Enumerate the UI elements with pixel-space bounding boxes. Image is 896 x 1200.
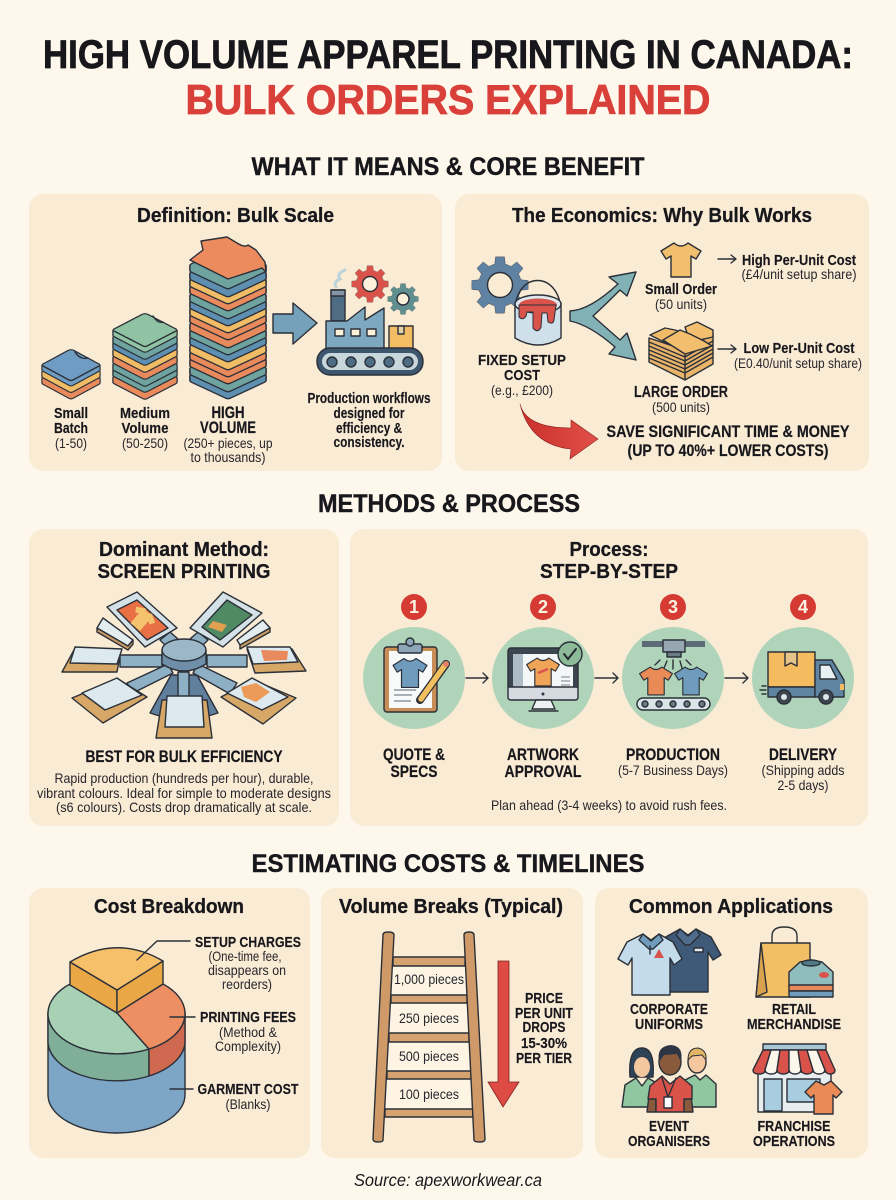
high cost label: (£4/unit setup share) — [742, 266, 856, 282]
price drop label: 15-30% — [521, 1035, 567, 1052]
icon: small order tee — [661, 243, 701, 277]
batch labels: Volume — [122, 420, 168, 437]
step labels: ARTWORK — [507, 746, 579, 764]
step labels: QUOTE & — [383, 746, 445, 764]
savings callout: (UP TO 40%+ LOWER COSTS) — [628, 442, 828, 460]
price drop label: PER UNIT — [515, 1005, 573, 1022]
label: setup charges: disappears on — [208, 962, 286, 978]
large order label: (500 units) — [652, 399, 710, 415]
step labels: 2-5 days) — [778, 777, 828, 793]
step badges: 3 — [668, 597, 678, 617]
savings callout — [606, 423, 850, 460]
icon: event staff — [622, 1045, 716, 1112]
caption: production workflows: consistency. — [334, 435, 404, 451]
low cost label: Low Per-Unit Cost — [744, 340, 855, 357]
panel: screen printing — [29, 529, 339, 826]
icon: gear and paint bucket — [472, 257, 561, 345]
price drop label — [515, 990, 573, 1067]
step badges: 2 — [538, 597, 548, 617]
panel heading: process: Process: — [570, 538, 648, 561]
icon: large order stacks — [649, 322, 713, 380]
icon: high volume stack — [190, 237, 266, 399]
screen printing description: (s6 colours). Costs drop dramatically at scale. — [56, 799, 312, 815]
panel: definition bulk scale — [29, 194, 442, 471]
step labels: (Shipping adds — [762, 762, 844, 778]
label: uniforms and retail: MERCHANDISE — [747, 1016, 841, 1033]
panel: volume breaks — [321, 888, 583, 1158]
screen printing description: vibrant colours. Ideal for simple to moderate designs — [37, 785, 331, 801]
price drop label: PER TIER — [516, 1050, 572, 1067]
icon: small stack — [42, 350, 100, 399]
heading: what it means: WHAT IT MEANS & CORE BENEFIT — [252, 153, 644, 181]
arrow: curved red — [520, 404, 598, 459]
batch labels: to thousands) — [190, 449, 266, 465]
arrow: small to high cost — [718, 255, 736, 263]
savings callout: SAVE SIGNIFICANT TIME & MONEY — [606, 423, 850, 441]
title: BULK ORDERS EXPLAINED — [186, 76, 710, 123]
arrow: to factory — [273, 303, 317, 344]
heading: estimating: ESTIMATING COSTS & TIMELINES — [252, 850, 644, 878]
label: garment cost — [198, 1081, 298, 1112]
setup cost label: (e.g., £200) — [491, 382, 553, 398]
price drop label: PRICE — [525, 990, 563, 1007]
step icon: delivery truck — [752, 627, 854, 729]
batch labels: (250+ pieces, up — [184, 435, 273, 451]
arrow: forked teal — [570, 272, 636, 360]
panel heading: process: STEP-BY-STEP — [540, 560, 678, 583]
panel heading: economics: The Economics: Why Bulk Works — [512, 204, 812, 227]
panel: economics — [455, 194, 869, 471]
low cost label — [734, 340, 862, 371]
low cost label: (E0.40/unit setup share) — [734, 355, 862, 371]
step labels — [383, 746, 844, 793]
step labels: (5-7 Business Days) — [618, 762, 728, 778]
heading: methods: METHODS & PROCESS — [318, 490, 580, 518]
panel heading: common applications: Common Applications — [629, 895, 833, 918]
label: garment cost: (Blanks) — [226, 1096, 270, 1112]
batch labels: Small — [54, 405, 88, 422]
ladder tier labels: 100 pieces — [399, 1086, 459, 1102]
panel: common applications — [595, 888, 868, 1158]
arrow: step 1 to 2 — [466, 673, 488, 683]
panel heading: screen printing: Dominant Method: — [99, 538, 269, 561]
label: events and franchise — [628, 1118, 835, 1150]
ladder tier labels: 1,000 pieces — [394, 971, 464, 987]
step icon: production conveyor — [622, 627, 724, 729]
icon: retail bag and shirt — [756, 927, 833, 997]
label: events and franchise: FRANCHISE — [758, 1118, 830, 1135]
step labels: PRODUCTION — [626, 746, 720, 764]
caption: production workflows: Production workflows — [308, 391, 430, 407]
high cost label: High Per-Unit Cost — [742, 252, 856, 269]
small order label: Small Order — [645, 281, 717, 298]
panel: process — [350, 529, 868, 826]
batch labels: HIGH — [212, 404, 244, 422]
ladder with tiers — [373, 932, 485, 1142]
panel heading: definition: Definition: Bulk Scale — [137, 204, 334, 227]
panel heading: screen printing — [98, 538, 270, 583]
arrow: large to low cost — [718, 345, 736, 353]
step icon: quote clipboard — [363, 627, 465, 729]
caption: production workflows: designed for — [334, 406, 405, 422]
label: events and franchise: EVENT — [649, 1118, 689, 1135]
process note: Plan ahead (3-4 weeks) to avoid rush fees. — [491, 797, 727, 813]
label: printing fees: PRINTING FEES — [200, 1009, 296, 1026]
setup cost label — [478, 352, 566, 398]
screen printing description — [37, 770, 331, 815]
title — [43, 33, 853, 123]
label: printing fees: (Method & — [219, 1024, 278, 1040]
batch labels: (50-250) — [122, 435, 168, 451]
label: events and franchise: OPERATIONS — [753, 1133, 835, 1150]
ladder tier labels — [394, 971, 464, 1102]
small order label — [645, 281, 717, 312]
caption: production workflows — [308, 391, 430, 451]
label: setup charges: (One-time fee, — [208, 948, 282, 964]
ladder tier labels: 500 pieces — [399, 1048, 459, 1064]
large order label: LARGE ORDER — [634, 384, 728, 401]
icon: medium stack — [113, 314, 177, 399]
label: uniforms and retail: RETAIL — [772, 1001, 816, 1018]
label: setup charges: SETUP CHARGES — [195, 934, 301, 951]
step badges: 4 — [798, 597, 808, 617]
source: Source: apexworkwear.ca — [354, 1170, 542, 1190]
panel heading: volume breaks: Volume Breaks (Typical) — [339, 895, 563, 918]
batch labels: Batch — [54, 420, 88, 437]
icon: franchise store — [753, 1044, 842, 1114]
large order label — [634, 384, 728, 415]
panel heading: cost breakdown: Cost Breakdown — [94, 895, 244, 918]
label: uniforms and retail: UNIFORMS — [635, 1016, 703, 1033]
label: setup charges: reorders) — [222, 976, 272, 992]
step icon: artwork monitor — [492, 627, 594, 729]
icon: corporate polos — [618, 929, 721, 995]
batch labels: Medium — [120, 405, 170, 422]
arrow: step 2 to 3 — [595, 673, 618, 683]
ladder tier labels: 250 pieces — [399, 1010, 459, 1026]
step badges: 1 — [409, 597, 419, 617]
label: printing fees: Complexity) — [215, 1038, 281, 1054]
batch labels — [54, 404, 273, 465]
icon: factory with gears — [317, 266, 423, 375]
batch labels: (1-50) — [55, 435, 87, 451]
arrow: price drop — [488, 961, 519, 1107]
step labels: APPROVAL — [504, 763, 582, 781]
setup cost label: FIXED SETUP — [478, 352, 566, 369]
setup cost label: COST — [504, 367, 540, 384]
batch labels: VOLUME — [200, 419, 256, 437]
price drop label: DROPS — [522, 1019, 566, 1036]
panel heading: screen printing: SCREEN PRINTING — [98, 560, 270, 583]
label: printing fees — [200, 1009, 296, 1054]
arrow: step 3 to 4 — [725, 673, 748, 683]
label: setup charges — [195, 934, 301, 992]
label: events and franchise: ORGANISERS — [628, 1133, 710, 1150]
chart: layered cost pie — [48, 948, 185, 1133]
label: garment cost: GARMENT COST — [198, 1081, 298, 1098]
step badges — [401, 594, 816, 620]
screen printing description: Rapid production (hundreds per hour), durable, — [54, 770, 314, 786]
panel heading: process — [540, 538, 678, 583]
high cost label — [742, 252, 856, 282]
best for bulk efficiency: BEST FOR BULK EFFICIENCY — [86, 748, 282, 766]
leader lines — [137, 941, 195, 1089]
icon: six-arm screen printing press — [62, 592, 306, 738]
panel: cost breakdown — [29, 888, 310, 1158]
label: uniforms and retail — [630, 1001, 841, 1033]
caption: production workflows: efficiency & — [336, 421, 402, 437]
step labels: DELIVERY — [769, 746, 837, 764]
step labels: SPECS — [390, 763, 438, 781]
label: uniforms and retail: CORPORATE — [630, 1001, 708, 1018]
small order label: (50 units) — [655, 296, 707, 312]
